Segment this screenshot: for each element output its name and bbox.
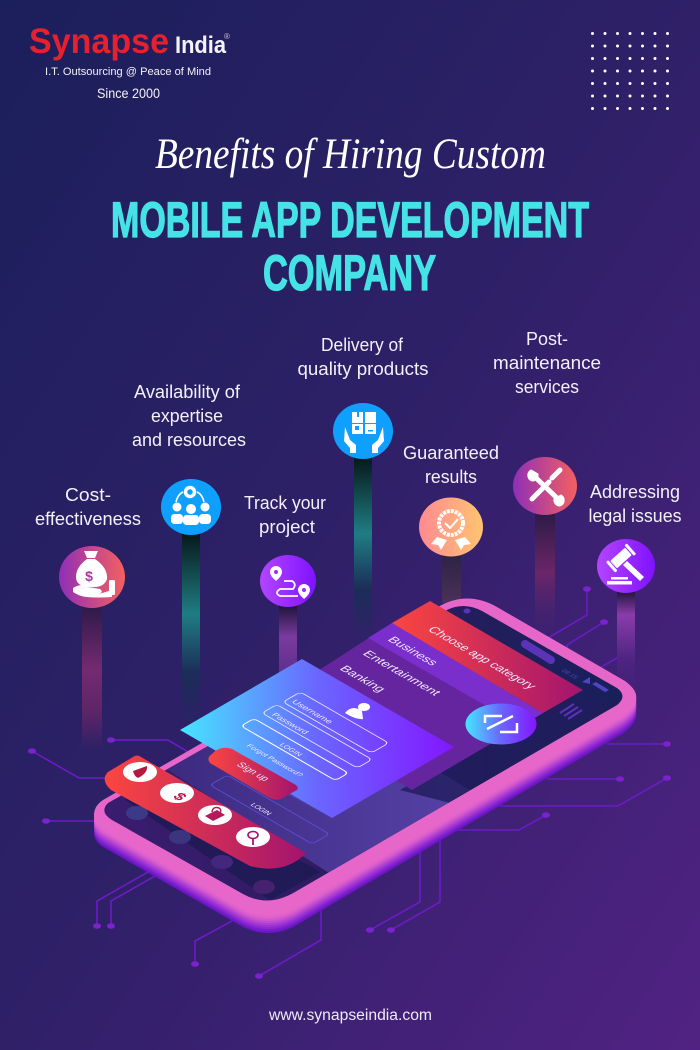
benefit: availability of expertise: Availability of bbox=[134, 382, 241, 402]
benefit: availability of expertise bbox=[132, 382, 246, 727]
phone body bbox=[90, 590, 640, 933]
title: COMPANY bbox=[263, 245, 436, 301]
benefit: post-maintenance services: maintenance bbox=[493, 353, 601, 373]
benefit: track your project bbox=[244, 493, 326, 675]
ghost login form: LOGIN bbox=[248, 802, 273, 817]
circuit lines bbox=[28, 586, 671, 979]
benefit: post-maintenance services: services bbox=[515, 377, 579, 397]
benefit: post-maintenance services bbox=[493, 329, 601, 636]
benefit: guaranteed results bbox=[403, 443, 499, 603]
benefit: cost-effectiveness: effectiveness bbox=[35, 509, 141, 529]
title: Benefits of Hiring Custom bbox=[155, 131, 546, 178]
icon: route pins bbox=[270, 566, 310, 599]
icon: wrench and screwdriver bbox=[528, 470, 564, 506]
icon: hands holding boxes bbox=[344, 412, 384, 453]
logo bbox=[29, 22, 230, 101]
login panel bbox=[180, 659, 454, 818]
logo: ® bbox=[224, 32, 230, 41]
menu icon bbox=[560, 704, 582, 719]
password field bbox=[262, 704, 372, 768]
password field: Password bbox=[269, 711, 311, 736]
sign up button: Sign up bbox=[233, 761, 272, 783]
purple category panel: Business bbox=[384, 634, 442, 668]
logo: Since 2000 bbox=[97, 85, 160, 101]
benefit: cost-effectiveness: Cost- bbox=[65, 485, 111, 505]
purple category panel bbox=[268, 601, 583, 790]
icon: money bag in hand: $ bbox=[85, 568, 93, 584]
footer url: www.synapseindia.com bbox=[268, 1007, 432, 1024]
username field bbox=[283, 692, 389, 753]
dock dots bbox=[126, 806, 275, 894]
icon: magnifier bbox=[236, 827, 270, 847]
logo: Synapse bbox=[29, 22, 169, 61]
benefit: addressing legal issues bbox=[588, 482, 682, 690]
benefit: delivery of quality products: Delivery of bbox=[321, 335, 404, 355]
benefit: delivery of quality products: quality products bbox=[298, 359, 428, 379]
icon: dollar bbox=[160, 783, 194, 804]
purple category panel: Banking bbox=[336, 663, 389, 694]
icon: dollar: $ bbox=[169, 790, 191, 804]
icon: team with gear bbox=[171, 488, 211, 525]
benefit: guaranteed results: Guaranteed bbox=[403, 443, 499, 463]
icon: padlock bbox=[198, 805, 232, 825]
benefit: addressing legal issues: legal issues bbox=[588, 506, 682, 526]
decorative dot grid bbox=[591, 32, 669, 110]
logo: India bbox=[175, 32, 227, 59]
phone side extrusion bbox=[94, 600, 636, 933]
ghost login form bbox=[212, 776, 328, 844]
code badge bbox=[466, 704, 536, 744]
benefit: availability of expertise: and resources bbox=[132, 430, 246, 450]
benefit: availability of expertise: expertise bbox=[151, 406, 223, 426]
sign up button bbox=[208, 748, 298, 800]
username field: Username bbox=[289, 698, 336, 725]
login panel: Forgot Password? bbox=[244, 743, 304, 778]
red header: choose app category bbox=[392, 601, 583, 713]
benefit: track your project: project bbox=[259, 517, 315, 537]
purple category panel: Entertainment bbox=[359, 648, 445, 698]
red header: choose app category: Choose app category bbox=[424, 624, 540, 691]
icon: shield bbox=[123, 762, 157, 782]
icon: quality badge bbox=[431, 511, 471, 550]
benefit: delivery of quality products bbox=[298, 335, 428, 641]
status bar: 08:15 bbox=[559, 668, 580, 680]
speaker and camera bbox=[464, 608, 551, 660]
login button: LOGIN bbox=[277, 742, 303, 758]
benefit: track your project: Track your bbox=[244, 493, 326, 513]
phone screen bbox=[104, 606, 622, 900]
red icon bar bbox=[105, 756, 306, 869]
icon: money bag in hand bbox=[73, 551, 115, 598]
status bar bbox=[559, 668, 609, 692]
benefit: cost-effectiveness bbox=[35, 485, 141, 750]
benefit: addressing legal issues: Addressing bbox=[590, 482, 680, 502]
user icon bbox=[345, 703, 370, 719]
benefit: guaranteed results: results bbox=[425, 467, 477, 487]
benefit: post-maintenance services: Post- bbox=[526, 329, 568, 349]
logo: I.T. Outsourcing @ Peace of Mind bbox=[45, 66, 211, 78]
title bbox=[111, 131, 589, 301]
login button bbox=[241, 718, 348, 780]
icon: gavel bbox=[606, 543, 644, 584]
